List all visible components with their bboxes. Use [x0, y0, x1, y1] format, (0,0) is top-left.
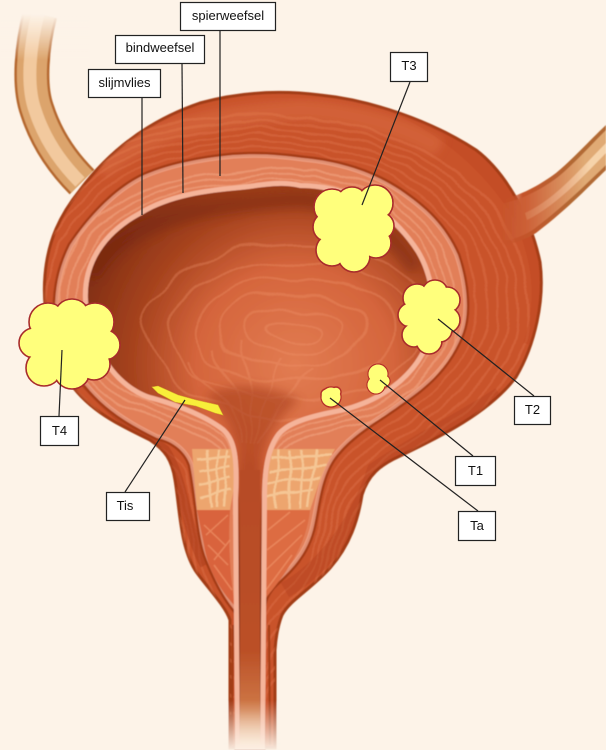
prostate tissue: right lower	[262, 510, 310, 600]
label: T4	[40, 416, 78, 446]
label: slijmvlies	[88, 70, 160, 98]
prostate tissue: right light	[262, 449, 335, 510]
urethra bottom fade	[222, 700, 282, 750]
label: spierweefsel: spierweefsel	[192, 8, 264, 23]
label: T2: T2	[525, 402, 540, 417]
label: T3: T3	[401, 58, 417, 73]
ureter: right	[500, 125, 606, 245]
label: T3	[390, 52, 428, 82]
tumour: Ta	[321, 387, 341, 407]
prostate tissue: left lower	[197, 510, 235, 606]
funnel shadow	[205, 386, 300, 480]
tumour: Tis	[152, 386, 223, 415]
mucosa pink band	[88, 186, 431, 745]
ureter top fade	[0, 0, 90, 60]
connective tissue striations	[59, 166, 458, 449]
label: T1: T1	[468, 463, 483, 478]
cavity folds	[139, 242, 418, 422]
prostate texture	[198, 450, 330, 508]
tumour: T2	[398, 280, 460, 354]
tumour: T4	[19, 299, 120, 389]
leader lines	[59, 30, 534, 511]
label: bindweefsel: bindweefsel	[126, 40, 194, 55]
bladder outer muscle wall	[0, 90, 541, 748]
tumour: T3	[313, 185, 394, 272]
label: T1	[456, 456, 496, 486]
ureter: left	[30, 14, 82, 182]
connective tissue layer	[55, 154, 467, 748]
prostate lower striations	[204, 512, 305, 590]
label: Ta	[458, 512, 496, 540]
bladder cavity	[88, 186, 445, 745]
muscle striations	[44, 101, 530, 714]
label: Ta: Ta	[470, 518, 485, 533]
label: T2	[514, 396, 550, 424]
label: Tis	[106, 492, 150, 520]
label: T4: T4	[52, 423, 67, 438]
label: Tis: Tis	[117, 498, 134, 513]
tumour: T1	[367, 364, 390, 394]
label: spierweefsel	[180, 2, 276, 30]
prostate tissue: left light	[192, 449, 237, 510]
label: bindweefsel	[116, 36, 204, 64]
cavity top shadow	[92, 200, 415, 275]
urethra column	[232, 470, 270, 745]
label: slijmvlies: slijmvlies	[98, 75, 151, 90]
